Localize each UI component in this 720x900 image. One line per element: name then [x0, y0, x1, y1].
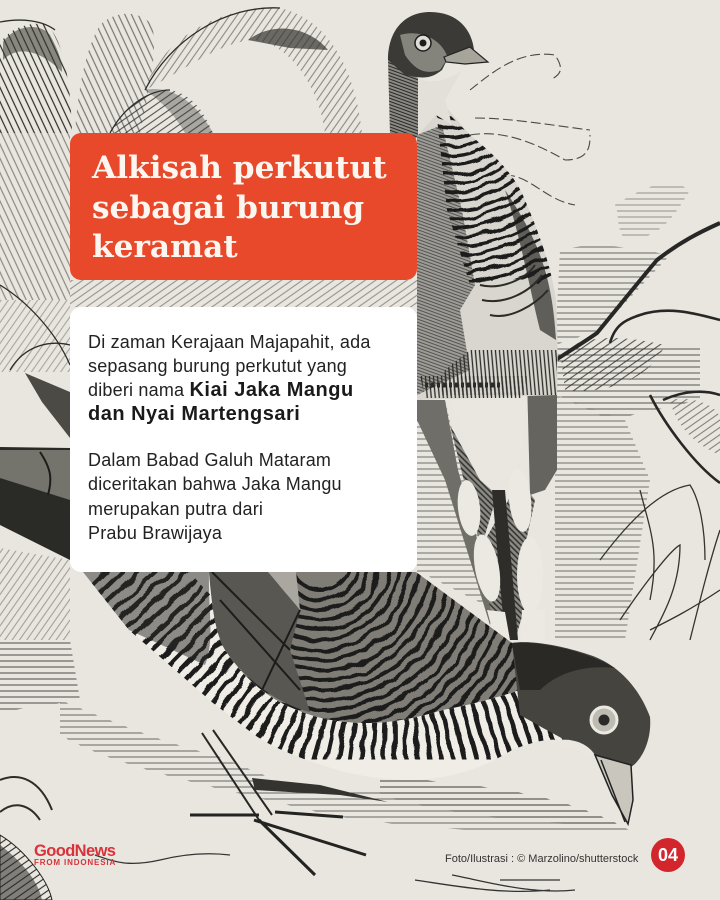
- paragraph: babad galuh mataram: Prabu Brawijaya: [88, 523, 222, 543]
- title banner: [70, 133, 417, 280]
- body base and hatching: [417, 100, 558, 400]
- branches: [528, 223, 720, 378]
- page number badge: 04: [658, 845, 678, 865]
- leaf: dark left: [0, 24, 72, 133]
- legs and feet: [202, 730, 313, 873]
- paragraph: babad galuh mataram: diceritakan bahwa Jaka Mangu: [88, 474, 342, 494]
- leaves beside title: [0, 133, 70, 300]
- page number badge: [651, 838, 685, 872]
- beak: [595, 755, 633, 824]
- background foliage, right side: [417, 54, 720, 640]
- neck: [388, 60, 424, 140]
- grass blades: [600, 485, 720, 640]
- feet: [420, 376, 528, 398]
- leaves, upper left: [0, 8, 417, 372]
- title banner: sebagai burung: [92, 190, 364, 226]
- paragraph: kiai jaka mangu: [88, 332, 371, 425]
- paragraph: babad galuh mataram: Dalam Babad Galuh Mataram: [88, 450, 331, 470]
- leaf: low fold: [110, 90, 213, 133]
- lower bird: [83, 572, 650, 876]
- upper bird: [388, 12, 558, 640]
- logo: GoodNews from Indonesia: GoodNews: [34, 842, 115, 860]
- hatched thicket: [555, 246, 670, 345]
- paragraph: kiai jaka mangu: Di zaman Kerajaan Majapahit, ada: [88, 332, 371, 352]
- head: [388, 12, 474, 77]
- paragraph: kiai jaka mangu: sepasang burung perkutut yang: [88, 356, 347, 376]
- beak: [444, 47, 488, 64]
- left tail of lower bird: [0, 373, 70, 560]
- logo: GoodNews from Indonesia: FROM INDONESIA: [34, 858, 116, 867]
- paragraph: kiai jaka mangu: diberi nama Kiai Jaka Mangu: [88, 379, 354, 401]
- title banner: keramat: [92, 229, 238, 265]
- wing feathers: [209, 572, 310, 712]
- leaf: broad arc: [145, 8, 362, 133]
- paragraph: kiai jaka mangu: dan Nyai Martengsari: [88, 403, 300, 425]
- sketch between title and card: [70, 280, 417, 307]
- back stripes: [209, 572, 566, 723]
- ground shadow and left foreground: [0, 548, 630, 900]
- text card: [70, 307, 417, 572]
- belly arcs: [480, 265, 548, 316]
- belly stripes: [83, 572, 590, 780]
- paragraph: babad galuh mataram: merupakan putra dari: [88, 499, 263, 519]
- head: [512, 642, 650, 767]
- title banner: Alkisah perkutut: [92, 150, 387, 186]
- breast stripes: [436, 115, 552, 284]
- dashed sketch near beak: [470, 54, 590, 205]
- leaf: tall centre: [75, 14, 154, 133]
- paragraph: babad galuh mataram: [88, 450, 342, 543]
- photo credit: Foto/Ilustrasi : © Marzolino/shutterstock: [445, 853, 638, 865]
- tail: [417, 365, 557, 645]
